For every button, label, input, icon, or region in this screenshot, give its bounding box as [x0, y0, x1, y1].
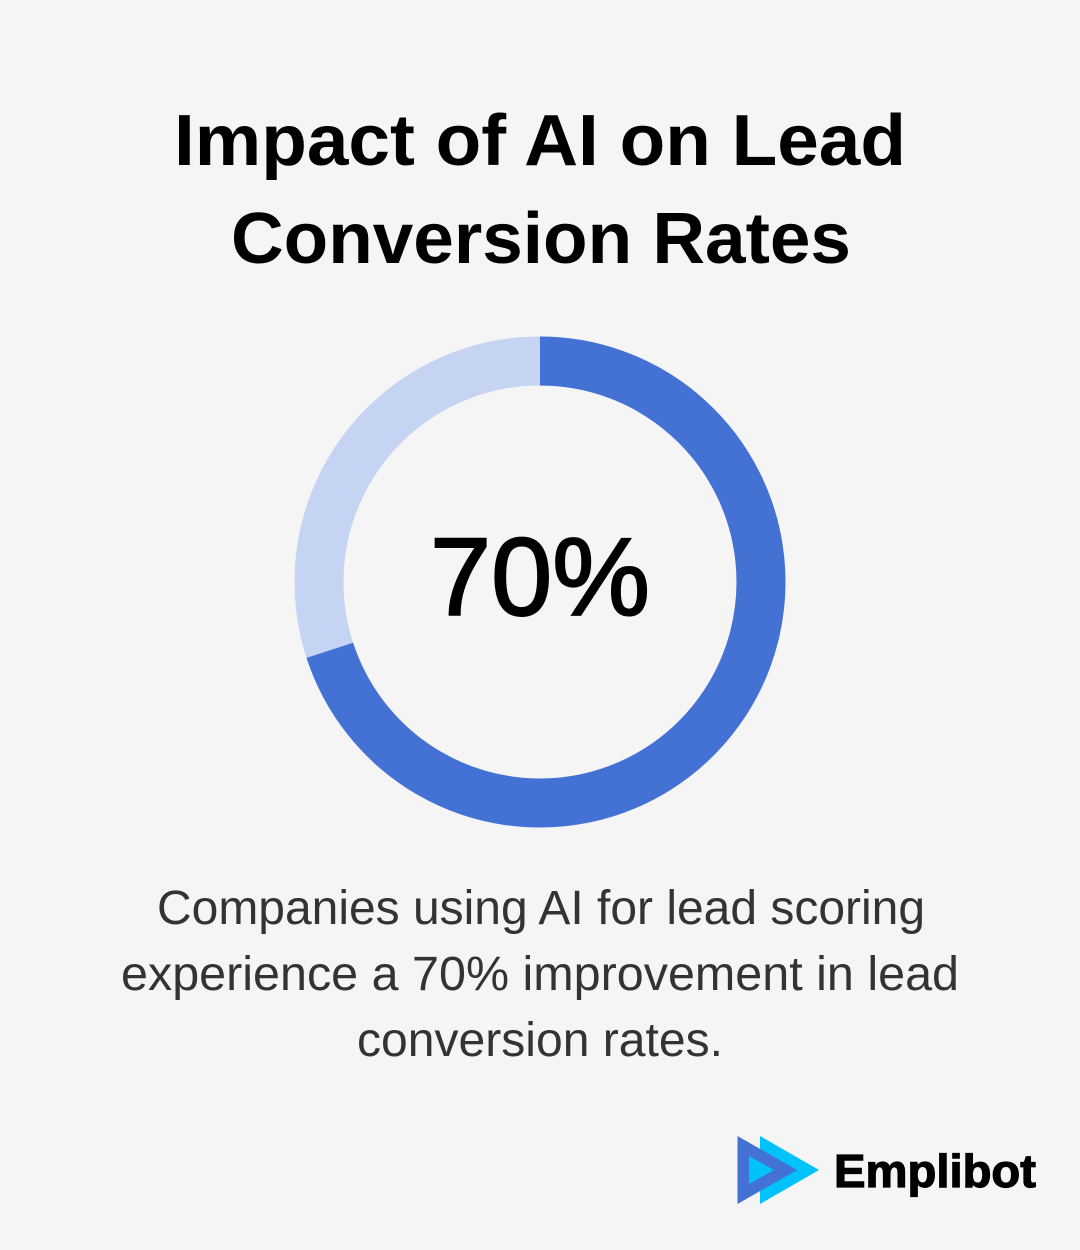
title: Impact of AI on Lead: [174, 101, 906, 181]
description text: conversion rates.: [357, 1014, 723, 1067]
description text: experience a 70% improvement in lead: [121, 948, 959, 1001]
description text: [121, 882, 959, 1067]
logo: Emplibot: [738, 1136, 1036, 1204]
title: [174, 101, 906, 279]
logo wordmark: Emplibot: [834, 1145, 1036, 1197]
donut centre value: 70%: [430, 516, 650, 639]
description text: Companies using AI for lead scoring: [157, 882, 925, 935]
donut chart: 70%: [319, 361, 761, 803]
icon: logo triangles: [738, 1136, 819, 1204]
title: Conversion Rates: [231, 199, 851, 279]
